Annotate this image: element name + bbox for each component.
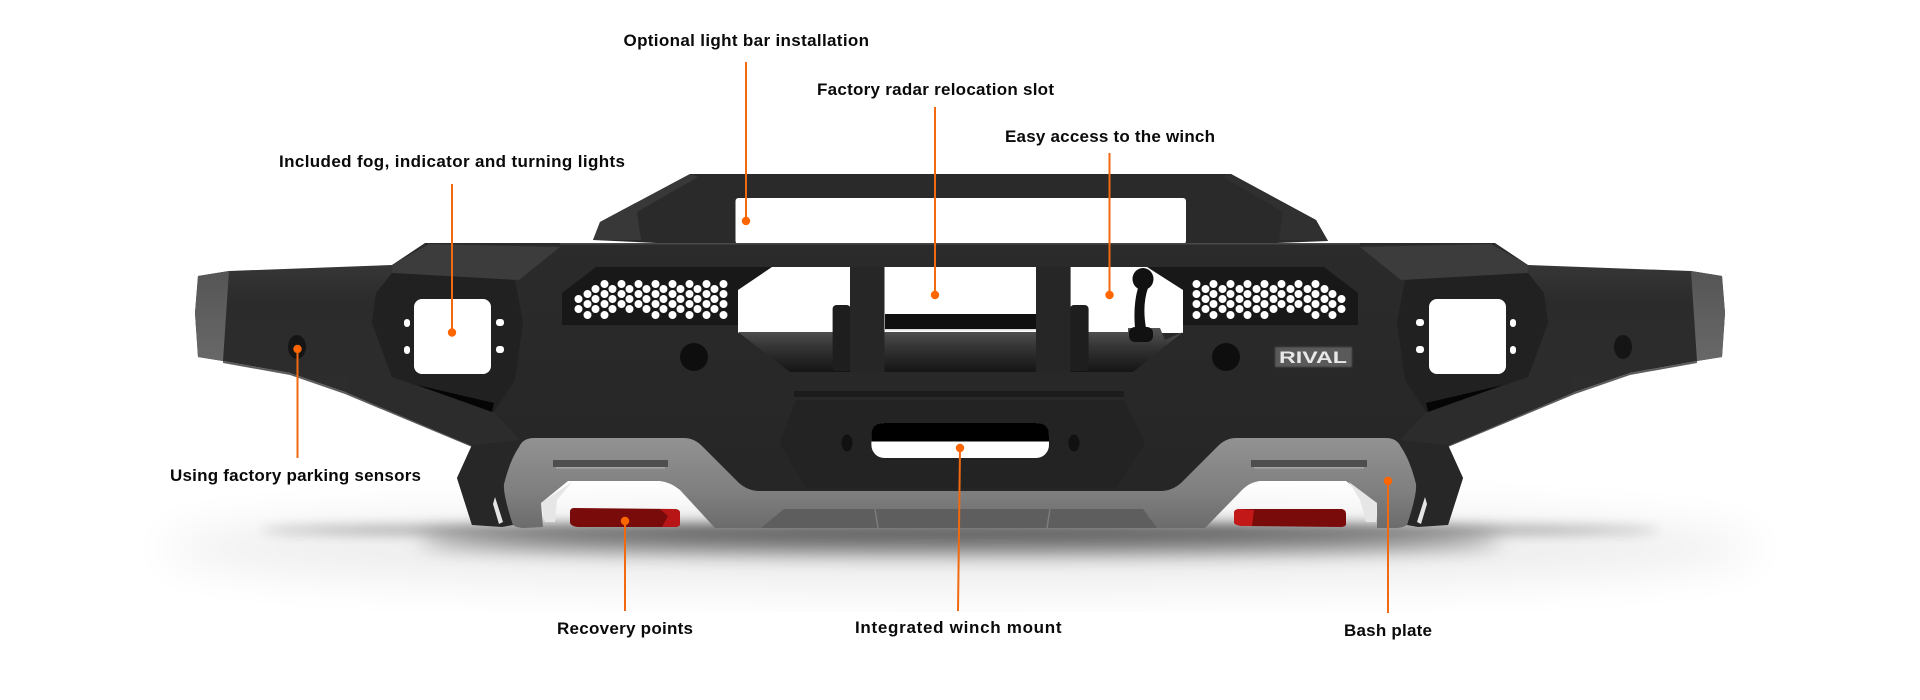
callout: parking sensors	[170, 345, 421, 485]
bash plate slots	[553, 460, 1367, 467]
lower winch plate	[780, 391, 1145, 488]
callout: parking sensors: Using factory parking sensors	[170, 466, 421, 485]
callout: recovery points: Recovery points	[557, 619, 693, 638]
central winch opening	[738, 267, 1183, 372]
right side assembly: wing, light pod, grille	[1148, 244, 1725, 527]
winch lever	[1129, 268, 1154, 342]
winch drum	[885, 314, 1036, 329]
recovery point right	[1234, 509, 1346, 527]
left side assembly: wing, light pod, grille	[195, 244, 772, 527]
right tow clip	[1349, 482, 1377, 522]
bash plate centre skid panels	[761, 509, 1157, 528]
winch brackets	[833, 305, 1089, 371]
fairlead slot	[871, 423, 1049, 458]
callout: fog lights	[279, 152, 625, 337]
infographic canvas	[171, 34, 1725, 640]
callout: optional light bar	[624, 31, 869, 225]
callout: easy winch access	[1005, 127, 1215, 299]
top edge highlight	[560, 243, 1360, 244]
callout: optional light bar: Optional light bar installation	[624, 31, 869, 50]
winch uprights	[850, 267, 1071, 372]
RIVAL logo badge	[1275, 347, 1352, 367]
callout: recovery points	[557, 517, 693, 638]
bash plate	[504, 438, 1416, 528]
callout: factory radar: Factory radar relocation slot	[817, 80, 1054, 99]
callout: bash plate: Bash plate	[1344, 621, 1432, 640]
left tow clip	[541, 482, 572, 522]
callout: factory radar	[817, 80, 1054, 299]
winch housing	[738, 328, 1183, 372]
upper hoop with light bar window	[593, 174, 1328, 246]
callout: winch mount	[855, 444, 1062, 637]
callout: winch mount: Integrated winch mount	[855, 618, 1062, 637]
callout: fog lights: Included fog, indicator and turning lights	[279, 152, 625, 171]
main bumper body	[372, 243, 1548, 525]
callout: easy winch access: Easy access to the winch	[1005, 127, 1215, 146]
ground shadow	[160, 506, 1760, 590]
callout: bash plate	[1344, 477, 1432, 640]
recovery point left	[570, 508, 680, 527]
light bar opening	[736, 198, 1186, 244]
RIVAL logo badge: RIVAL	[1279, 348, 1347, 367]
